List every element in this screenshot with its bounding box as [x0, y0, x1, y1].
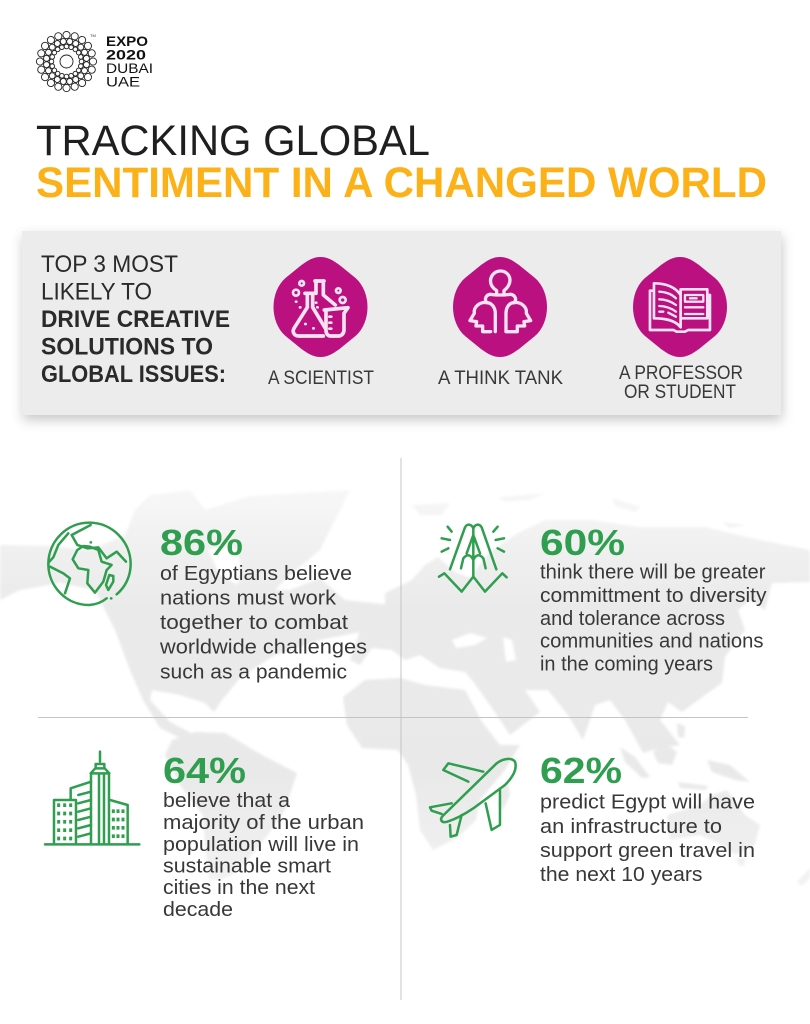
- title: SENTIMENT IN A CHANGED WORLD: [36, 159, 767, 207]
- logo: Expo 2020 Dubai UAE: [36, 31, 153, 92]
- title: TRACKING GLOBAL: [36, 117, 430, 165]
- panel: top 3 most likely: [22, 231, 781, 415]
- icon: city buildings: [45, 752, 139, 844]
- label: a professor or student: [619, 363, 743, 403]
- stat text: nations must work: [160, 586, 337, 610]
- panel heading: GLOBAL ISSUES:: [41, 361, 226, 388]
- stat value: 62%: [540, 750, 622, 791]
- stat text: decade: [163, 898, 233, 921]
- world map background: [0, 490, 810, 886]
- logo wordmark: UAE: [106, 74, 140, 90]
- stat value: 86%: [160, 522, 243, 563]
- stat text: sustainable smart: [163, 854, 331, 878]
- stat text: majority of the urban: [163, 811, 364, 834]
- stat text: communities and nations: [540, 630, 764, 652]
- logo wordmark: EXPO: [106, 34, 148, 49]
- stat text: the next 10 years: [540, 863, 702, 886]
- stat text: in the coming years: [540, 652, 713, 676]
- stat text: population will live in: [163, 833, 359, 856]
- logo wordmark: DUBAI: [106, 61, 153, 76]
- stat value: 60%: [540, 522, 625, 563]
- panel heading: DRIVE CREATIVE: [41, 306, 230, 333]
- stat text: [540, 790, 755, 886]
- divider: horizontal: [38, 717, 748, 718]
- stat value: 64%: [163, 750, 246, 791]
- icon: scientist flasks: [274, 257, 368, 357]
- label: a professor or student: OR STUDENT: [624, 382, 736, 403]
- stat text: believe that a: [163, 789, 291, 812]
- seas: [208, 545, 516, 662]
- stat text: predict Egypt will have: [540, 790, 755, 814]
- icon: airplane: [430, 759, 516, 837]
- icon: globe: [48, 523, 131, 605]
- stat text: an infrastructure to: [540, 815, 722, 838]
- icon: praying hands: [439, 525, 507, 592]
- panel heading: LIKELY TO: [41, 278, 152, 306]
- logo wordmark: [106, 34, 153, 90]
- stat text: cities in the next: [163, 876, 315, 899]
- stat text: think there will be greater: [540, 560, 766, 584]
- title: [36, 117, 767, 207]
- logo mark: ring of circles: [36, 31, 97, 92]
- stat: 62% green travel infrastructure: [430, 750, 755, 886]
- divider: vertical: [400, 458, 402, 1000]
- stat text: together to combat: [160, 611, 348, 634]
- logo trademark: TM: [90, 33, 96, 38]
- icon: think tank heads: [453, 257, 547, 357]
- stat text: such as a pandemic: [160, 660, 347, 684]
- panel heading: SOLUTIONS TO: [41, 334, 213, 360]
- stat text: [159, 562, 367, 684]
- stat: 86% nations must work together: [48, 522, 367, 684]
- label: a scientist: A SCIENTIST: [268, 368, 374, 389]
- stat: 60% diversity and tolerance: [439, 522, 767, 676]
- label: a think tank: A THINK TANK: [438, 368, 563, 389]
- stat text: committment to diversity: [540, 584, 767, 607]
- icon: open book: [633, 257, 727, 357]
- label: a professor or student: A PROFESSOR: [619, 363, 743, 384]
- stat text: of Egyptians believe: [160, 562, 352, 585]
- logo wordmark: 2020: [106, 48, 146, 62]
- stat text: [163, 789, 364, 921]
- stat text: support green travel in: [540, 839, 755, 862]
- panel heading: TOP 3 MOST: [41, 251, 178, 278]
- stat text: [540, 560, 767, 676]
- stat text: and tolerance across: [540, 607, 725, 630]
- panel heading: [41, 251, 230, 388]
- stat: 64% sustainable smart cities: [45, 750, 364, 921]
- stat text: worldwide challenges: [159, 636, 367, 658]
